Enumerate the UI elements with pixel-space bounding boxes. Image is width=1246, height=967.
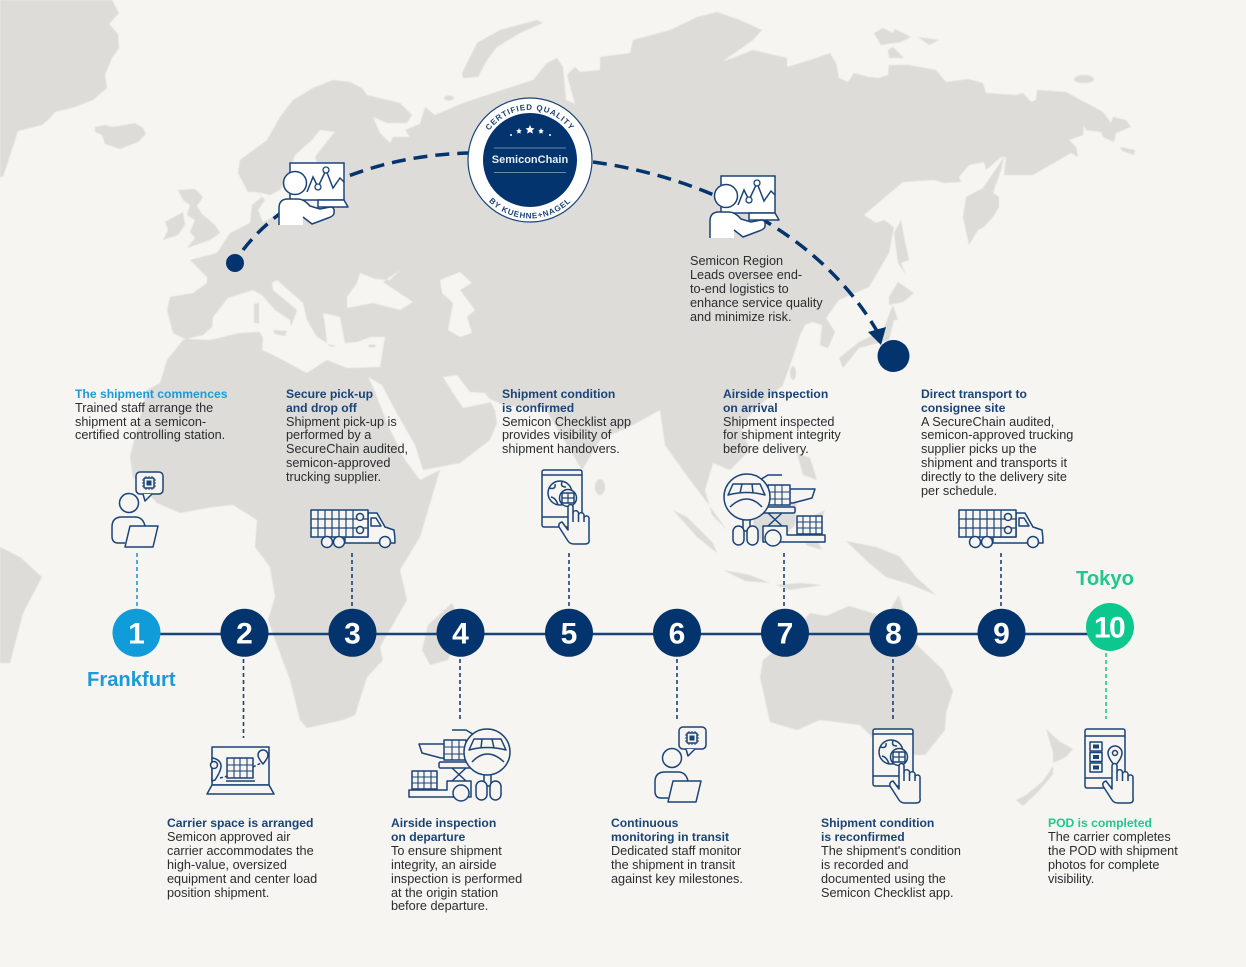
step 9 heading: Direct transport to [921,387,1027,401]
step 9 heading [921,387,1027,415]
step 5 heading [502,387,615,415]
step 8 body: documented using the [821,872,946,886]
step 8 heading: is reconfirmed [821,830,905,844]
step 4 body: before departure. [391,899,488,913]
step 8 heading [821,816,934,844]
step 8 body: The shipment's condition [821,844,961,858]
text: semicon region leads: Semicon Region [690,254,783,268]
step 8 body [821,844,961,900]
text: semicon region leads: Leads oversee end- [690,268,802,282]
step 3 body: trucking supplier. [286,470,381,484]
step 8 body: Semicon Checklist app. [821,886,954,900]
destination dot [878,340,910,372]
step 3 body: SecureChain audited, [286,442,408,456]
step 2 body: position shipment. [167,886,269,900]
step 6 heading [611,816,729,844]
step 10 body: The carrier completes [1048,830,1171,844]
step 10 text [1048,816,1178,886]
step 10 heading: POD is completed [1048,816,1152,830]
step 3 body: semicon-approved [286,456,390,470]
icon: phone app, step 8 [873,729,920,803]
step 1 body: Trained staff arrange the [75,401,213,415]
step number circles: 6 [669,618,685,650]
step 3 heading: Secure pick-up [286,387,373,401]
step 3 text [286,387,408,484]
icon: phone with proof of delivery, step 10 [1085,729,1133,803]
step number circles [112,603,1134,657]
step 7 text [723,387,841,456]
step number circles: 2 [236,618,253,650]
step 8 text [821,816,961,900]
certified quality badge: BY KUEHNE+NAGEL [489,198,570,218]
step 5 body: provides visibility of [502,428,611,442]
step number circles: 3 [344,618,361,650]
step 7 heading [723,387,828,415]
icon: presenter Europe [279,163,348,225]
connector lines [137,553,1106,738]
step 9 body: supplier picks up the [921,442,1037,456]
timeline line [137,633,1110,635]
step 5 text [502,387,631,456]
step 2 heading: Carrier space is arranged [167,816,313,830]
step 1 heading: The shipment commences [75,387,227,401]
step number circles: 9 [993,618,1010,650]
step 1 body: shipment at a semicon- [75,414,206,428]
icon: presenter Asia [710,176,779,238]
text: semicon region leads [690,254,823,324]
step 10 body: visibility. [1048,872,1094,886]
step 6 heading: monitoring in transit [611,830,729,844]
origin dot [226,254,244,272]
route arc: Frankfurt to certified quality badge [243,153,470,250]
step 3 heading: and drop off [286,401,357,415]
icon: staff monitoring, step 6 [655,727,706,802]
step 6 body: against key milestones. [611,872,743,886]
step 6 text [611,816,743,886]
city label: Tokyo: Tokyo [1076,568,1134,590]
step 7 heading: on arrival [723,401,778,415]
step 10 body: photos for complete [1048,858,1159,872]
step 3 heading [286,387,373,415]
step 1 text [75,387,227,442]
city label: Frankfurt: Frankfurt [87,669,176,691]
icon: staff with laptop, step 1 [112,472,163,547]
icon: airside loader, step 4 [409,729,510,801]
step 2 text [167,816,317,900]
step 9 heading: consignee site [921,401,1005,415]
certified quality badge: CERTIFIED QUALITY [486,104,574,130]
step 6 body: the shipment in transit [611,858,735,872]
step 3 body: performed by a [286,428,371,442]
step number circles: 1 [128,618,145,650]
text: semicon region leads: to-end logistics to [690,282,789,296]
step 5 body [502,414,631,456]
step 4 body [391,844,522,913]
step 4 body: inspection is performed [391,872,522,886]
step 2 body: equipment and center load [167,872,317,886]
step number circles: 4 [452,618,469,650]
step 9 body: shipment and transports it [921,456,1067,470]
step number circles: 5 [561,618,577,650]
step 10 body [1048,830,1178,886]
step 7 body: for shipment integrity [723,428,841,442]
step 9 body [921,414,1073,498]
step 9 text [921,387,1073,498]
step 6 body: Dedicated staff monitor [611,844,741,858]
step 4 heading [391,816,496,844]
step 9 body: directly to the delivery site [921,470,1067,484]
step number circles: 8 [885,618,902,650]
step 8 heading: Shipment condition [821,816,934,830]
step 5 body: shipment handovers. [502,442,620,456]
step 3 body: Shipment pick-up is [286,414,397,428]
certified quality badge: SemiconChain [492,154,568,166]
step 10 body: the POD with shipment [1048,844,1178,858]
step 7 heading: Airside inspection [723,387,828,401]
step 2 body [167,830,317,900]
icon: truck, step 9 [959,510,1043,548]
step 3 body [286,414,408,484]
step 7 body: before delivery. [723,442,809,456]
icon: phone app, step 5 [542,470,589,544]
step 4 heading: Airside inspection [391,816,496,830]
icon: laptop with route, step 2 [207,747,274,794]
step 8 body: is recorded and [821,858,908,872]
step 9 body: semicon-approved trucking [921,428,1073,442]
route arc: badge to Tokyo [593,162,882,340]
arrow head [868,327,886,345]
step number circles: 10 [1094,612,1125,644]
step 5 heading: Shipment condition [502,387,615,401]
step number circles: 7 [777,618,793,650]
step 2 body: high-value, oversized [167,858,287,872]
step 4 body: at the origin station [391,886,498,900]
step 9 body: per schedule. [921,484,997,498]
step 6 body [611,844,743,886]
step 6 heading: Continuous [611,816,678,830]
step 5 body: Semicon Checklist app [502,414,631,428]
step 4 text [391,816,522,913]
step 4 heading: on departure [391,830,465,844]
world map background [0,0,1135,806]
text: semicon region leads: enhance service quality [690,296,823,310]
step 9 body: A SecureChain audited, [921,414,1054,428]
step 1 body: certified controlling station. [75,428,225,442]
step 7 body: Shipment inspected [723,414,834,428]
step 4 body: integrity, an airside [391,858,497,872]
step 2 body: Semicon approved air [167,830,290,844]
icon: airside loader, step 7 [724,474,825,546]
step 1 body [75,401,225,442]
icon: truck, step 3 [311,510,395,548]
step 4 body: To ensure shipment [391,844,502,858]
step 7 body [723,414,841,456]
text: semicon region leads: and minimize risk. [690,310,792,324]
step 2 body: carrier accommodates the [167,844,314,858]
certified quality badge [467,97,593,223]
step 5 heading: is confirmed [502,401,574,415]
